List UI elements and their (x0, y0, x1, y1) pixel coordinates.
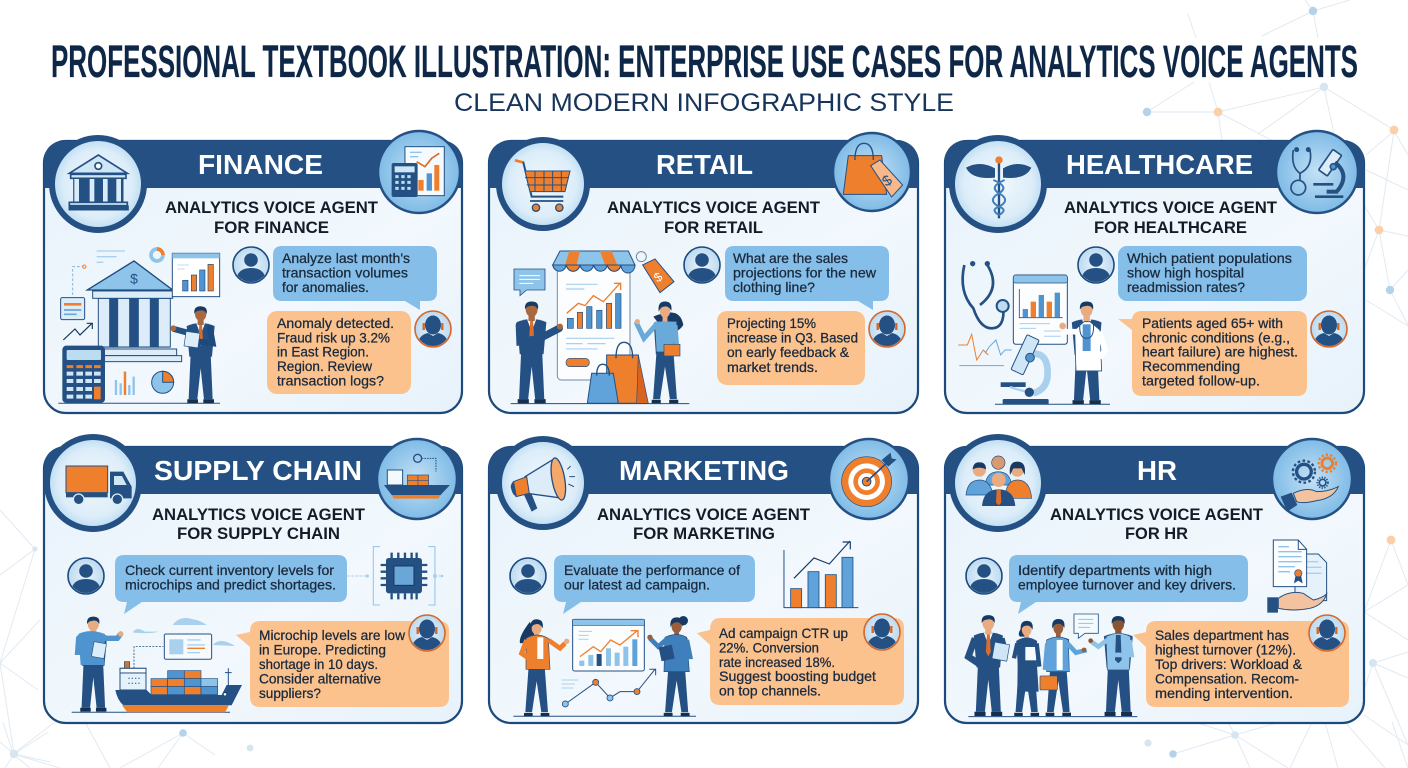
bubble: user query: clothing line? (733, 280, 815, 295)
illustration: clinic scene (958, 261, 1110, 404)
bubble: agent reply (267, 311, 411, 394)
bubble: user query (554, 555, 755, 614)
bubble: agent reply: on top channels. (719, 683, 821, 698)
icon: calculator and chart (378, 131, 460, 213)
subheading (607, 199, 820, 237)
icon: megaphone (499, 439, 587, 527)
icon: cargo ship (377, 439, 457, 519)
bubble: agent reply: mending intervention. (1155, 686, 1293, 701)
avatar: agent (1309, 615, 1345, 651)
bubble: agent reply: transaction logs? (277, 373, 384, 388)
bubble: agent reply (1118, 311, 1307, 396)
bubble: user query: Which patient populations (1127, 251, 1292, 266)
illustration: ship scene (72, 617, 242, 712)
bubble: agent reply: shortage in 10 days. (259, 657, 378, 672)
bubble: agent reply: Projecting 15% (727, 316, 816, 331)
bubble: user query (273, 246, 437, 310)
illustration: hr team (968, 614, 1137, 717)
avatar: user (68, 558, 104, 594)
bubble: agent reply: Anomaly detected. (277, 316, 394, 331)
bubble: agent reply: Microchip levels are low (259, 628, 405, 643)
bubble: user query: Check current inventory levels for (125, 563, 334, 578)
subheading: ANALYTICS VOICE AGENT (152, 506, 365, 524)
subheading (165, 199, 378, 237)
bubble: agent reply: market trends. (727, 360, 818, 375)
bubble: agent reply: Sales department has (1155, 628, 1289, 643)
bubble: agent reply: Suggest boosting budget (719, 669, 876, 684)
bubble: user query (1009, 555, 1248, 614)
bubble: agent reply (697, 618, 904, 705)
subheading (597, 506, 810, 543)
icon: gears in hand (1272, 439, 1352, 519)
bubble: agent reply: 22%. Conversion (719, 640, 819, 655)
avatar: user (233, 247, 269, 283)
bubble: agent reply: Fraud risk up 3.2% (277, 330, 390, 345)
bubble: agent reply: Region. Review (277, 359, 372, 374)
bubble: user query (1118, 246, 1307, 301)
subheading: FOR MARKETING (633, 525, 775, 543)
avatar: agent (869, 311, 905, 347)
panel: finance (44, 131, 462, 413)
bubble: agent reply: increase in Q3. Based (727, 331, 858, 346)
subheading: FOR HR (1125, 525, 1188, 543)
bubble: agent reply: Consider alternative (259, 671, 381, 686)
avatar: agent (864, 614, 900, 650)
subheading: ANALYTICS VOICE AGENT (607, 199, 820, 217)
bubble: user query: employee turnover and key drivers. (1018, 578, 1236, 592)
illustration: marketing team (513, 616, 696, 716)
avatar: user (966, 558, 1002, 594)
heading: hr: HR (1137, 455, 1177, 486)
bubble: user query: for anomalies. (282, 280, 369, 295)
bubble: agent reply: Compensation. Recom- (1155, 671, 1299, 686)
panel: healthcare (945, 131, 1364, 413)
subheading (1064, 199, 1277, 237)
avatar: user (1078, 247, 1114, 283)
subtitle: CLEAN MODERN INFOGRAPHIC STYLE (454, 89, 954, 117)
subheading: ANALYTICS VOICE AGENT (597, 506, 810, 524)
panel: supply chain (44, 437, 462, 723)
heading: retail: RETAIL (656, 149, 753, 180)
heading: healthcare: HEALTHCARE (1066, 149, 1253, 180)
subheading: FOR HEALTHCARE (1094, 219, 1247, 237)
icon: shopping bag with tag (833, 133, 911, 211)
subheading: FOR FINANCE (214, 219, 329, 237)
icon: stethoscope and microscope (1276, 131, 1358, 213)
bubble: user query: microchips and predict shortages. (125, 578, 336, 592)
illustration: bank scene: $ (130, 271, 138, 287)
icon: caduceus (952, 138, 1044, 230)
bubble: agent reply (1133, 621, 1349, 707)
icon: shopping cart (499, 140, 587, 228)
bubble: user query: What are the sales (733, 251, 848, 266)
bubble: agent reply: chronic conditions (e.g., (1142, 330, 1290, 345)
icon: team (952, 437, 1044, 529)
bubble: agent reply: targeted follow-up. (1142, 373, 1260, 388)
heading: supply chain: SUPPLY CHAIN (154, 455, 362, 486)
bubble: agent reply: Ad campaign CTR up (719, 626, 848, 641)
subheading: ANALYTICS VOICE AGENT (1064, 199, 1277, 217)
bubble: agent reply: Recommending (1142, 359, 1240, 374)
heading: marketing: MARKETING (619, 455, 789, 486)
bubble: user query: Identify departments with high (1018, 563, 1212, 578)
icon: target (829, 439, 909, 519)
bubble: agent reply: in Europe. Predicting (259, 643, 386, 658)
panel: marketing (489, 439, 918, 723)
bubble: user query (115, 555, 347, 614)
bubble: agent reply: Patients aged 65+ with (1142, 316, 1283, 331)
illustration: bank scene (58, 249, 220, 403)
bubble: agent reply: highest turnover (12%). (1155, 643, 1296, 658)
bubble: agent reply: Top drivers: Workload & (1155, 657, 1302, 672)
bubble: user query: Evaluate the performance of (564, 563, 740, 578)
subheading: ANALYTICS VOICE AGENT (1050, 506, 1263, 524)
avatar: user (510, 558, 546, 594)
bubble: agent reply (717, 311, 865, 385)
illustration: store scene: $ (651, 270, 665, 285)
chart: rising bars (784, 541, 858, 608)
bubble: agent reply: heart failure) are highest. (1142, 345, 1298, 360)
subheading: FOR SUPPLY CHAIN (177, 525, 340, 543)
bubble: agent reply: in East Region. (277, 345, 369, 360)
subheading: FOR RETAIL (664, 219, 763, 237)
avatar: agent (415, 311, 451, 347)
icon: truck (47, 437, 139, 529)
heading: finance: FINANCE (198, 149, 323, 180)
bubble: agent reply: on early feedback & (727, 345, 849, 360)
panel: hr (945, 437, 1364, 723)
icon: documents in hand (1267, 540, 1327, 613)
bubble: user query (725, 246, 889, 310)
bubble: user query: transaction volumes (282, 266, 408, 280)
bubble: user query: readmission rates? (1127, 280, 1245, 295)
bubble: user query: our latest ad campaign. (564, 578, 710, 592)
bubble: agent reply: suppliers? (259, 686, 321, 701)
panel: retail (489, 133, 918, 413)
bubble: user query: projections for the new (733, 266, 876, 280)
icon: microchip (347, 547, 443, 605)
avatar: agent (1311, 311, 1347, 347)
avatar: agent (409, 615, 445, 651)
icon: shopping bag with tag: $ (880, 172, 896, 190)
subheading (152, 506, 365, 543)
avatar: user (684, 247, 720, 283)
bubble: user query: Analyze last month's (282, 251, 410, 266)
bubble: agent reply: rate increased 18%. (719, 655, 835, 670)
subheading (1050, 506, 1263, 543)
subheading: ANALYTICS VOICE AGENT (165, 199, 378, 217)
bubble: agent reply (236, 621, 449, 707)
icon: bank (52, 138, 144, 230)
illustration: store scene (511, 251, 689, 404)
bubble: user query: show high hospital (1127, 266, 1244, 280)
